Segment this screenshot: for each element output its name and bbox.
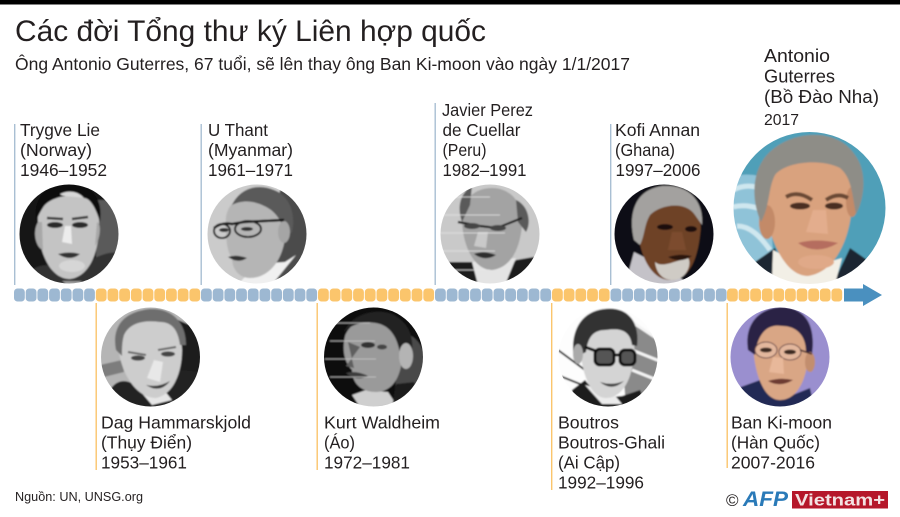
label xyxy=(558,412,665,492)
label: (Peru) xyxy=(442,140,486,160)
label: Kurt Waldheim xyxy=(324,412,440,432)
portrait xyxy=(100,305,202,410)
timeline segment: Ban Ki-moon 2007-2016 xyxy=(727,288,842,302)
stem xyxy=(200,124,202,285)
label: (Thụy Điển) xyxy=(101,432,192,452)
label xyxy=(731,412,832,472)
label: 1982–1991 xyxy=(442,160,526,180)
label: Dag Hammarskjold xyxy=(101,412,251,432)
subtitle: Ông Antonio Guterres, 67 tuổi, sẽ lên thay ông Ban Ki-moon vào ngày 1/1/2017 xyxy=(15,53,630,74)
label xyxy=(615,120,700,180)
label: (Myanmar) xyxy=(208,140,293,160)
label: Boutros-Ghali xyxy=(558,432,665,452)
Vietnam+ logo: Vietnam+ xyxy=(795,490,885,510)
source: Nguồn: UN, UNSG.org xyxy=(15,489,143,504)
entry: Javier Perez de Cuellar xyxy=(434,100,545,290)
label: 1961–1971 xyxy=(208,160,293,180)
top bar xyxy=(0,0,900,4)
stem xyxy=(726,303,728,468)
entry: Dag Hammarskjold xyxy=(96,303,251,472)
timeline segment: Kurt Waldheim 1972-1981 xyxy=(318,288,434,302)
stem xyxy=(96,303,97,470)
label: Antonio xyxy=(764,46,830,66)
timeline segment: Dag Hammarskjold 1953-1961 xyxy=(96,288,200,302)
entry: Trygve Lie xyxy=(14,123,118,285)
label xyxy=(208,120,293,180)
label: 1972–1981 xyxy=(324,452,410,472)
stem xyxy=(14,124,15,285)
label xyxy=(442,100,533,180)
label: de Cuellar xyxy=(442,120,521,140)
label: (Ai Cập) xyxy=(558,452,620,472)
stem xyxy=(610,124,611,285)
label: Boutros xyxy=(558,412,619,432)
label: 2017 xyxy=(764,112,799,129)
label: Guterres xyxy=(764,66,835,86)
AFP logo: AFP xyxy=(742,488,789,511)
timeline segment: Javier Perez de Cuellar 1982-1991 xyxy=(435,288,551,302)
label: Kofi Annan xyxy=(615,120,700,140)
label: 2007-2016 xyxy=(731,452,815,472)
portrait xyxy=(324,308,423,406)
stem xyxy=(434,103,436,285)
timeline segment: Trygve Lie 1946-1952 xyxy=(14,288,95,302)
timeline segment: Kofi Annan 1997-2006 xyxy=(610,288,727,302)
label: (Bồ Đào Nha) xyxy=(764,87,879,107)
entry: U Thant xyxy=(200,120,310,287)
label: Ban Ki-moon xyxy=(731,412,832,432)
label xyxy=(101,412,251,472)
portrait xyxy=(208,184,306,284)
label: Trygve Lie xyxy=(20,120,100,140)
label: (Ghana) xyxy=(615,140,675,160)
label: (Áo) xyxy=(324,432,355,452)
copyright symbol: © xyxy=(726,491,739,510)
label: U Thant xyxy=(208,120,268,140)
label: (Hàn Quốc) xyxy=(731,432,820,452)
portrait xyxy=(730,308,830,406)
label xyxy=(20,120,107,180)
label: 1953–1961 xyxy=(101,452,187,472)
arrow xyxy=(844,284,882,306)
entry: Kurt Waldheim xyxy=(316,303,440,472)
label: Javier Perez xyxy=(442,100,533,120)
label: 1992–1996 xyxy=(558,472,644,492)
label xyxy=(764,46,879,129)
label xyxy=(324,412,440,472)
portrait xyxy=(558,308,658,406)
entry: Boutros Boutros-Ghali xyxy=(551,303,665,492)
label: (Norway) xyxy=(20,140,92,160)
entry: Ban Ki-moon xyxy=(726,303,833,472)
label: 1997–2006 xyxy=(616,160,700,180)
title: Các đời Tổng thư ký Liên hợp quốc xyxy=(15,15,486,48)
portrait xyxy=(440,184,540,284)
stem xyxy=(551,303,552,490)
stem xyxy=(316,303,318,470)
timeline xyxy=(14,284,882,306)
timeline segment: Boutros Boutros-Ghali 1992-1996 xyxy=(552,288,610,302)
entry: Kofi Annan xyxy=(610,120,717,287)
portrait xyxy=(734,132,886,284)
entry: Antonio Guterres xyxy=(730,46,890,290)
credit: copyright and AFP logo xyxy=(726,488,789,511)
portrait xyxy=(614,184,714,284)
label: 1946–1952 xyxy=(20,160,107,180)
portrait xyxy=(20,184,118,284)
timeline segment: U Thant 1961-1971 xyxy=(201,288,317,302)
